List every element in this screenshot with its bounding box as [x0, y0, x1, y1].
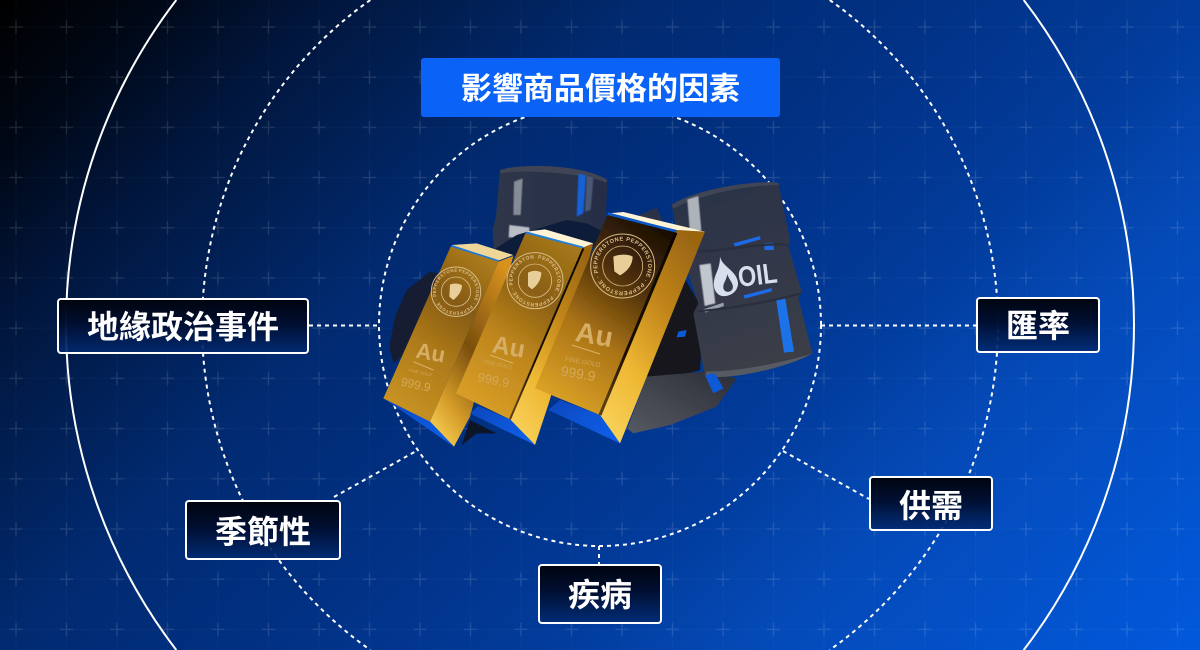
- gold bar middle: [456, 229, 594, 445]
- label: geopolitical events: [58, 299, 308, 353]
- gold bar left: Au: [414, 338, 447, 367]
- inner dashed circle: [379, 104, 821, 546]
- gold bar right: 999.9: [560, 362, 597, 384]
- title banner: 影響商品價格的因素: [461, 72, 740, 106]
- middle dashed circle: [202, 0, 998, 650]
- label: seasonality: [186, 501, 340, 559]
- gold bar left: [383, 243, 514, 446]
- label: disease: 疾病: [568, 577, 632, 613]
- label: disease: [539, 565, 661, 623]
- front oil barrel: [672, 182, 812, 393]
- gold bar right: Au: [573, 316, 615, 353]
- label: supply and demand: 供需: [899, 488, 963, 524]
- gold bar middle: FINE GOLD: [483, 359, 512, 371]
- lower dark barrel: [627, 372, 737, 433]
- gold bar middle: Au: [490, 331, 527, 364]
- connector lines: [309, 326, 977, 565]
- illustration: gold bars and oil barrels: [383, 166, 812, 446]
- label: exchange rates: [977, 298, 1099, 352]
- OIL label: OIL: [736, 256, 779, 294]
- label: supply and demand: [870, 477, 992, 530]
- gold bar right: PEPPERSTONE · PEPPERSTONE · PEPPERSTONE: [593, 236, 652, 296]
- gold bar left: PEPPERSTONE · PEPPERSTONE · PEPPERSTONE: [433, 268, 479, 315]
- back oil barrel: [493, 166, 607, 250]
- gold bar middle: PEPPERSTONE · PEPPERSTONE · PEPPERSTONE: [509, 255, 561, 306]
- label: exchange rates: 匯率: [1006, 308, 1070, 344]
- title banner: [421, 58, 780, 117]
- icon: flame drop: [714, 257, 738, 296]
- coal rocks: [389, 208, 703, 445]
- gold bar left: FINE GOLD: [408, 368, 432, 377]
- gold bar left: 999.9: [400, 375, 432, 395]
- gold bar right: FINE GOLD: [564, 356, 601, 369]
- label: geopolitical events: 地緣政治事件: [87, 309, 279, 345]
- gold bar middle: 999.9: [477, 370, 510, 391]
- gold bar right: [535, 212, 705, 444]
- label: seasonality: 季節性: [215, 514, 311, 550]
